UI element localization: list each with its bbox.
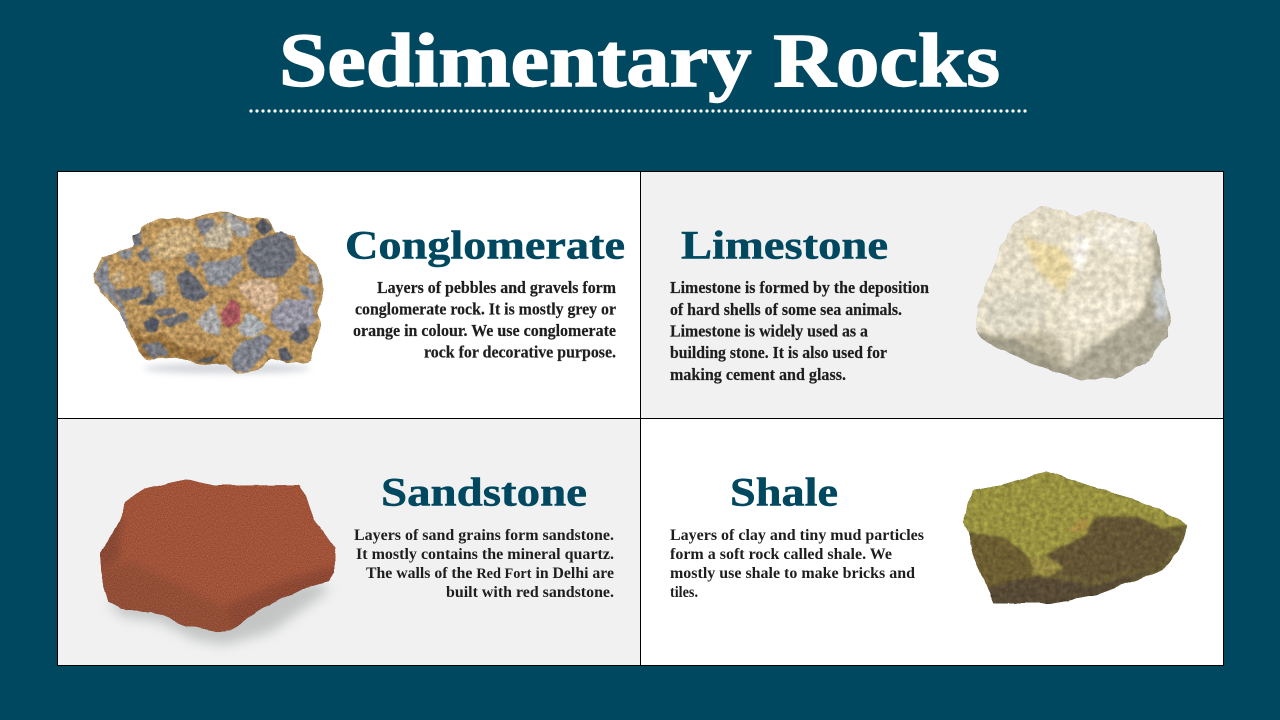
heading: conglomerate: Conglomerate xyxy=(345,222,625,268)
panel: limestone xyxy=(640,172,1224,418)
panel: conglomerate xyxy=(58,172,640,418)
text: conglomerate description: Layers of pebbles and gravels form xyxy=(377,278,616,297)
text: limestone description: making cement and glass. xyxy=(670,365,846,384)
text: shale description xyxy=(670,527,924,601)
text: limestone description: Limestone is formed by the deposition xyxy=(670,278,929,297)
text: sandstone description: The walls of the Red Fort in Delhi are xyxy=(366,565,614,582)
text: shale description: tiles. xyxy=(670,584,698,601)
text: limestone description xyxy=(670,278,929,384)
text: shale description: Layers of clay and tiny mud particles xyxy=(670,527,924,544)
text: sandstone description: built with red sandstone. xyxy=(446,584,614,601)
panel: sandstone xyxy=(58,418,640,666)
text: sandstone description: It mostly contains the mineral quartz. xyxy=(356,546,614,563)
text: conglomerate description xyxy=(353,278,616,362)
text: sandstone description: Layers of sand grains form sandstone. xyxy=(354,527,614,544)
text: limestone description: Limestone is widely used as a xyxy=(670,322,868,340)
icon: sandstone rock xyxy=(100,479,335,645)
text: limestone description: building stone. It is also used for xyxy=(670,343,887,362)
panel: shale xyxy=(640,418,1224,666)
text: conglomerate description: rock for decorative purpose. xyxy=(424,342,616,362)
icon: limestone rock xyxy=(975,207,1170,380)
icon: shale rock xyxy=(963,472,1187,603)
text: shale description: form a soft rock called shale. We xyxy=(670,546,892,563)
title dotted underline xyxy=(251,109,1028,113)
heading: limestone: Limestone xyxy=(681,222,888,268)
text: sandstone description xyxy=(354,527,614,601)
heading: sandstone: Sandstone xyxy=(381,470,587,514)
text: limestone description: of hard shells of some sea animals. xyxy=(670,300,902,319)
text: conglomerate description: orange in colour. We use conglomerate xyxy=(353,321,616,340)
icon: conglomerate rock xyxy=(95,213,323,374)
heading: shale: Shale xyxy=(730,470,838,514)
text: conglomerate description: conglomerate rock. It is mostly grey or xyxy=(355,300,616,318)
title: Sedimentary Rocks xyxy=(279,19,1000,103)
text: shale description: mostly use shale to make bricks and xyxy=(670,565,915,582)
